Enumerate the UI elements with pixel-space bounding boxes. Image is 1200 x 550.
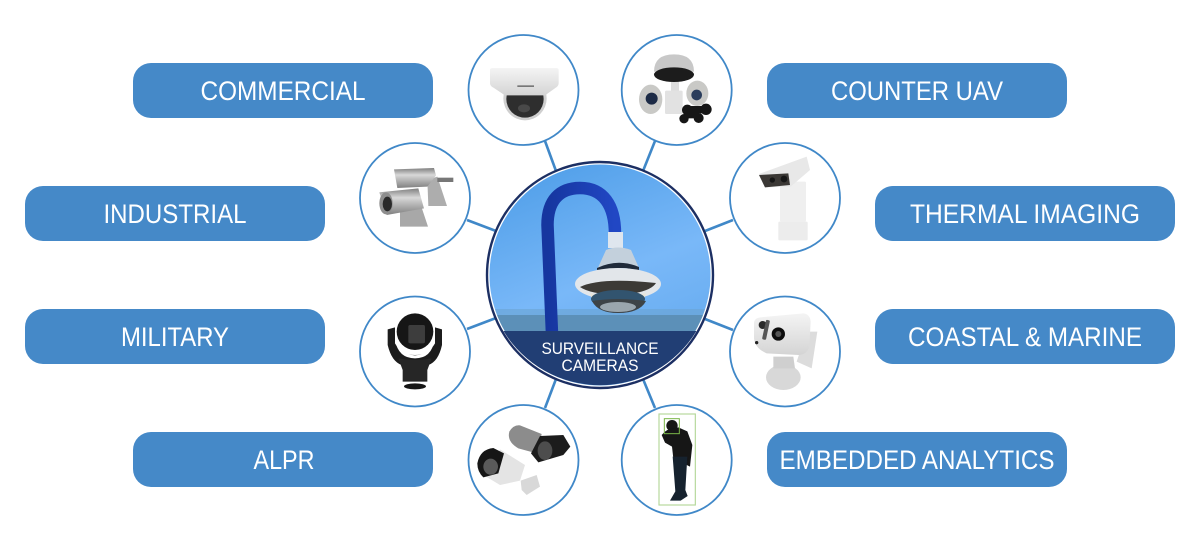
central image circle [487,162,713,388]
node: industrial camera [360,143,470,253]
pill: embedded analytics [767,432,1067,487]
node: thermal imaging camera [730,143,840,253]
pill: military [25,309,325,364]
pill: coastal and marine: COASTAL & MARINE [908,322,1142,352]
node: military camera [360,296,470,406]
banner label [504,331,696,385]
pill: embedded analytics: EMBEDDED ANALYTICS [780,445,1054,475]
node: commercial dome camera [468,35,578,145]
pill: thermal imaging: THERMAL IMAGING [910,199,1140,229]
banner label: CAMERAS [562,357,638,375]
pill: coastal and marine [875,309,1175,364]
connector lines [467,141,733,408]
pill: commercial [133,63,433,118]
node: counter uav camera [622,35,732,145]
node: alpr camera [468,405,578,515]
pill: thermal imaging [875,186,1175,241]
pill: counter uav: COUNTER UAV [831,76,1003,106]
pill: alpr [133,432,433,487]
banner label: SURVEILLANCE [542,340,658,358]
pill: industrial [25,186,325,241]
pill: industrial: INDUSTRIAL [104,199,246,229]
pill: commercial: COMMERCIAL [200,76,366,106]
node: coastal and marine camera [730,296,840,406]
pill: alpr: ALPR [254,445,314,475]
node: embedded analytics figure [622,405,732,515]
pill: counter uav [767,63,1067,118]
pill: military: MILITARY [121,322,229,352]
